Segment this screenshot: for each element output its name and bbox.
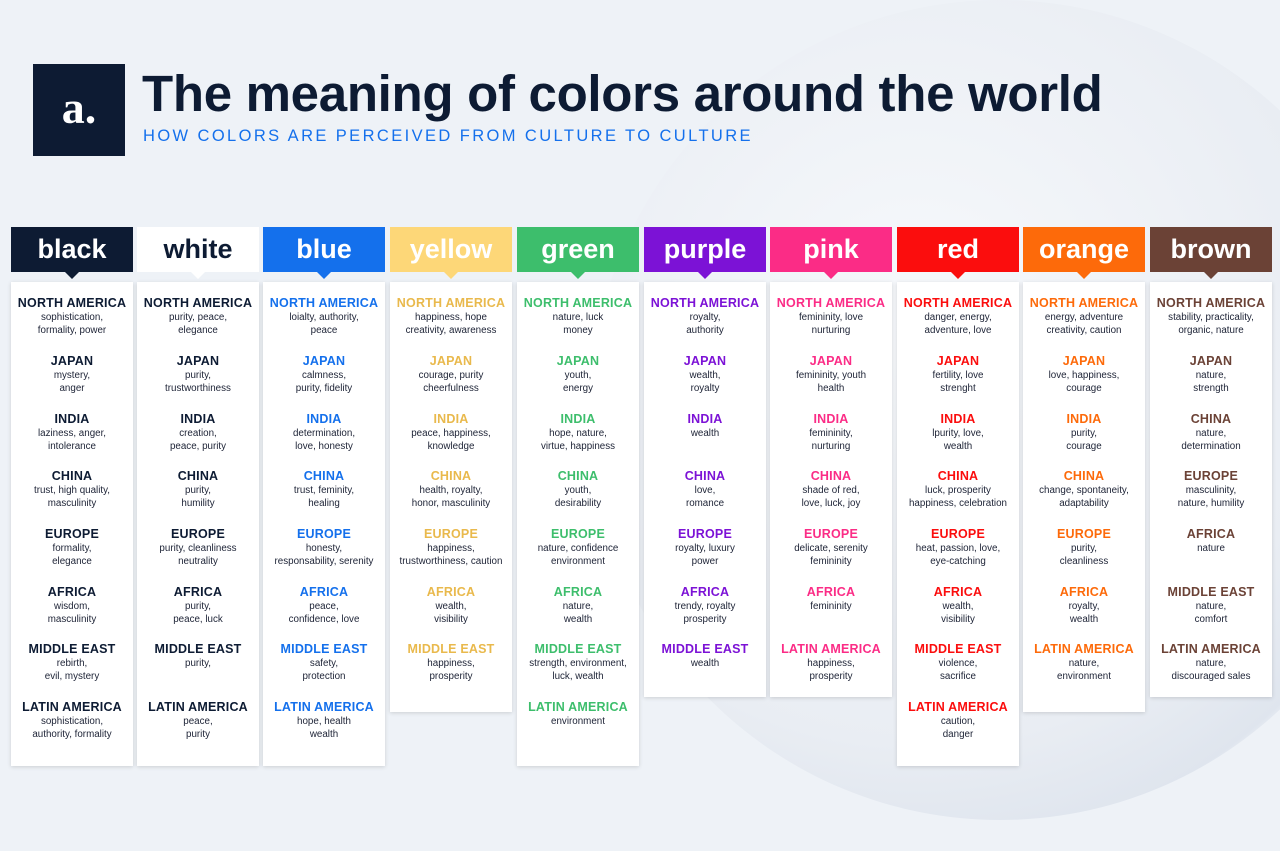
text: NORTH AMERICA	[18, 296, 126, 310]
text: purity, peace,	[169, 312, 227, 323]
text: creation,	[179, 428, 217, 439]
text: MIDDLE EAST	[915, 642, 1001, 656]
text: JAPAN	[1063, 354, 1105, 368]
text: visibility	[434, 614, 468, 625]
text: JAPAN	[1190, 354, 1232, 368]
text: strenght	[940, 383, 976, 394]
text: happiness,	[427, 658, 475, 669]
text: creativity, awareness	[406, 325, 496, 336]
text: creativity, caution	[1047, 325, 1121, 336]
text: humility	[181, 498, 215, 509]
text: CHINA	[558, 469, 598, 483]
text: CHINA	[431, 469, 471, 483]
text: nurturing	[812, 325, 850, 336]
text: trust, feminity,	[294, 485, 354, 496]
text: JAPAN	[430, 354, 472, 368]
text: LATIN AMERICA	[908, 700, 1008, 714]
column: yellow	[388, 227, 514, 714]
text: NORTH AMERICA	[1030, 296, 1138, 310]
text: danger, energy,	[924, 312, 992, 323]
text: luck, wealth	[552, 671, 604, 682]
subtitle: HOW COLORS ARE PERCEIVED FROM CULTURE TO CULTURE	[143, 127, 753, 145]
column: pink: pink	[803, 234, 859, 264]
text: CHINA	[811, 469, 851, 483]
text: healing	[308, 498, 340, 509]
text: happiness, hope	[415, 312, 487, 323]
text: nature,	[1196, 601, 1226, 612]
text: violence,	[939, 658, 977, 669]
text: JAPAN	[810, 354, 852, 368]
text: purity,	[185, 485, 211, 496]
text: health, royalty,	[420, 485, 482, 496]
text: laziness, anger,	[38, 428, 106, 439]
text: peace,	[309, 601, 339, 612]
text: AFRICA	[300, 585, 348, 599]
text: knowledge	[428, 441, 474, 452]
text: MIDDLE EAST	[662, 642, 748, 656]
text: responsability, serenity	[275, 556, 373, 567]
text: change, spontaneity,	[1039, 485, 1129, 496]
text: wealth,	[435, 601, 467, 612]
text: purity,	[1071, 543, 1097, 554]
text: CHINA	[304, 469, 344, 483]
text: purity,	[185, 601, 211, 612]
text: nature,	[563, 601, 593, 612]
text: trustworthiness, caution	[400, 556, 502, 567]
text: nature,	[1196, 370, 1226, 381]
text: anger	[59, 383, 85, 394]
column: pink	[768, 227, 894, 700]
text: JAPAN	[303, 354, 345, 368]
text: heat, passion, love,	[916, 543, 1000, 554]
text: purity, fidelity	[296, 383, 352, 394]
text: nature, luck	[553, 312, 603, 323]
text: honor, masculinity	[412, 498, 490, 509]
text: prosperity	[429, 671, 472, 682]
text: INDIA	[180, 412, 216, 426]
text: health	[818, 383, 844, 394]
text: peace, luck	[173, 614, 223, 625]
text: eye-catching	[930, 556, 986, 567]
text: nature, confidence	[538, 543, 618, 554]
text: formality,	[52, 543, 92, 554]
text: evil, mystery	[45, 671, 99, 682]
text: JAPAN	[684, 354, 726, 368]
text: masculinity	[48, 614, 96, 625]
text: NORTH AMERICA	[397, 296, 505, 310]
text: JAPAN	[51, 354, 93, 368]
text: JAPAN	[937, 354, 979, 368]
text: neutrality	[178, 556, 218, 567]
text: wealth,	[689, 370, 721, 381]
text: money	[563, 325, 593, 336]
text: femininity, love	[799, 312, 863, 323]
text: purity,	[185, 370, 211, 381]
column: blue: blue	[296, 234, 352, 264]
text: sacrifice	[940, 671, 976, 682]
column: white: white	[163, 234, 232, 264]
logo	[33, 64, 125, 156]
text: delicate, serenity	[794, 543, 868, 554]
text: happiness,	[427, 543, 475, 554]
text: EUROPE	[424, 527, 478, 541]
text: MIDDLE EAST	[408, 642, 494, 656]
text: NORTH AMERICA	[777, 296, 885, 310]
title: The meaning of colors around the world	[142, 65, 1102, 122]
text: prosperity	[683, 614, 726, 625]
text: cheerfulness	[423, 383, 479, 394]
text: AFRICA	[174, 585, 222, 599]
text: purity,	[185, 658, 211, 669]
text: sophistication,	[41, 312, 103, 323]
text: wisdom,	[54, 601, 90, 612]
text: CHINA	[685, 469, 725, 483]
text: INDIA	[306, 412, 342, 426]
text: romance	[686, 498, 724, 509]
text: peace	[311, 325, 337, 336]
text: stability, practicality,	[1168, 312, 1254, 323]
text: INDIA	[433, 412, 469, 426]
text: purity, cleanliness	[159, 543, 237, 554]
text: authority, formality	[32, 729, 112, 740]
text: sophistication,	[41, 716, 103, 727]
text: wealth	[691, 428, 719, 439]
text: INDIA	[940, 412, 976, 426]
text: NORTH AMERICA	[270, 296, 378, 310]
text: fertility, love	[932, 370, 984, 381]
text: love, happiness,	[1049, 370, 1119, 381]
column: brown: brown	[1170, 234, 1252, 264]
text: formality, power	[38, 325, 106, 336]
column: orange: orange	[1039, 234, 1129, 264]
text: environment	[551, 556, 605, 567]
text: determination	[1181, 441, 1241, 452]
text: hope, health	[297, 716, 351, 727]
column: yellow: yellow	[410, 234, 492, 264]
text: calmness,	[302, 370, 346, 381]
text: INDIA	[687, 412, 723, 426]
text: nature,	[1196, 658, 1226, 669]
text: trust, high quality,	[34, 485, 110, 496]
text: EUROPE	[678, 527, 732, 541]
text: trustworthiness	[165, 383, 231, 394]
text: NORTH AMERICA	[651, 296, 759, 310]
text: youth,	[565, 370, 591, 381]
text: energy, adventure	[1045, 312, 1123, 323]
column: black	[10, 227, 134, 768]
text: comfort	[1195, 614, 1227, 625]
column: green	[516, 227, 640, 768]
text: EUROPE	[551, 527, 605, 541]
text: masculinity	[48, 498, 96, 509]
text: visibility	[941, 614, 975, 625]
text: EUROPE	[804, 527, 858, 541]
column: red	[896, 227, 1020, 768]
text: mystery,	[54, 370, 90, 381]
text: peace,	[183, 716, 213, 727]
text: INDIA	[1066, 412, 1102, 426]
text: safety,	[310, 658, 338, 669]
text: NORTH AMERICA	[904, 296, 1012, 310]
text: LATIN AMERICA	[781, 642, 881, 656]
text: MIDDLE EAST	[281, 642, 367, 656]
text: AFRICA	[934, 585, 982, 599]
column: purple	[642, 227, 768, 700]
text: femininity, youth	[796, 370, 866, 381]
text: peace, purity	[170, 441, 226, 452]
text: lpurity, love,	[932, 428, 984, 439]
text: courage	[1066, 441, 1102, 452]
text: EUROPE	[297, 527, 351, 541]
text: CHINA	[938, 469, 978, 483]
text: EUROPE	[1057, 527, 1111, 541]
column: green: green	[541, 234, 615, 264]
text: femininity	[810, 601, 852, 612]
text: nature, humility	[1178, 498, 1244, 509]
text: AFRICA	[681, 585, 729, 599]
text: MIDDLE EAST	[1168, 585, 1254, 599]
column: blue	[262, 227, 386, 768]
text: CHINA	[1064, 469, 1104, 483]
text: royalty, luxury	[675, 543, 735, 554]
text: youth,	[565, 485, 591, 496]
text: AFRICA	[427, 585, 475, 599]
text: shade of red,	[802, 485, 860, 496]
text: wealth	[310, 729, 338, 740]
text: AFRICA	[1187, 527, 1235, 541]
text: happiness, celebration	[909, 498, 1007, 509]
text: MIDDLE EAST	[535, 642, 621, 656]
text: luck, prosperity	[925, 485, 991, 496]
text: INDIA	[560, 412, 596, 426]
text: NORTH AMERICA	[1157, 296, 1265, 310]
text: love, luck, joy	[802, 498, 860, 509]
background globe	[590, 0, 1280, 820]
text: purity,	[1071, 428, 1097, 439]
text: JAPAN	[177, 354, 219, 368]
text: love,	[695, 485, 715, 496]
text: purity	[186, 729, 210, 740]
text: masculinity,	[1186, 485, 1236, 496]
text: NORTH AMERICA	[524, 296, 632, 310]
text: LATIN AMERICA	[528, 700, 628, 714]
column: purple: purple	[664, 234, 746, 264]
column: black: black	[37, 234, 107, 264]
text: elegance	[178, 325, 218, 336]
text: peace, happiness,	[411, 428, 491, 439]
text: EUROPE	[171, 527, 225, 541]
text: determination,	[293, 428, 355, 439]
text: AFRICA	[1060, 585, 1108, 599]
text: nature,	[1196, 428, 1226, 439]
text: courage	[1066, 383, 1102, 394]
text: royalty	[691, 383, 719, 394]
text: honesty,	[306, 543, 342, 554]
text: adaptability	[1059, 498, 1109, 509]
text: LATIN AMERICA	[274, 700, 374, 714]
text: strength	[1193, 383, 1229, 394]
text: environment	[551, 716, 605, 727]
text: NORTH AMERICA	[144, 296, 252, 310]
text: CHINA	[178, 469, 218, 483]
text: confidence, love	[289, 614, 359, 625]
text: CHINA	[1191, 412, 1231, 426]
text: hope, nature,	[549, 428, 607, 439]
text: trendy, royalty	[675, 601, 735, 612]
text: nature,	[1069, 658, 1099, 669]
text: courage, purity	[419, 370, 483, 381]
text: cleanliness	[1060, 556, 1108, 567]
text: organic, nature	[1178, 325, 1244, 336]
text: AFRICA	[48, 585, 96, 599]
text: CHINA	[52, 469, 92, 483]
text: MIDDLE EAST	[29, 642, 115, 656]
text: rebirth,	[57, 658, 87, 669]
text: love, honesty	[295, 441, 353, 452]
text: energy	[563, 383, 593, 394]
text: INDIA	[813, 412, 849, 426]
text: power	[692, 556, 718, 567]
text: wealth	[944, 441, 972, 452]
column: white	[136, 227, 260, 768]
text: desirability	[555, 498, 601, 509]
text: caution,	[941, 716, 975, 727]
text: LATIN AMERICA	[1161, 642, 1261, 656]
text: nurturing	[812, 441, 850, 452]
text: wealth	[1070, 614, 1098, 625]
text: EUROPE	[931, 527, 985, 541]
text: authority	[686, 325, 724, 336]
column: orange	[1022, 227, 1146, 714]
text: protection	[302, 671, 346, 682]
text: MIDDLE EAST	[155, 642, 241, 656]
text: EUROPE	[45, 527, 99, 541]
text: wealth,	[942, 601, 974, 612]
text: strength, environment,	[529, 658, 627, 669]
text: LATIN AMERICA	[1034, 642, 1134, 656]
text: prosperity	[809, 671, 852, 682]
text: femininity,	[809, 428, 853, 439]
text: royalty,	[690, 312, 720, 323]
text: LATIN AMERICA	[148, 700, 248, 714]
text: wealth	[564, 614, 592, 625]
text: adventure, love	[924, 325, 992, 336]
text: INDIA	[54, 412, 90, 426]
text: virtue, happiness	[541, 441, 615, 452]
text: nature	[1197, 543, 1225, 554]
text: elegance	[52, 556, 92, 567]
text: LATIN AMERICA	[22, 700, 122, 714]
text: intolerance	[48, 441, 96, 452]
column: brown	[1148, 227, 1274, 700]
text: happiness,	[807, 658, 855, 669]
logo: a.	[62, 82, 96, 133]
text: discouraged sales	[1172, 671, 1250, 682]
text: EUROPE	[1184, 469, 1238, 483]
text: danger	[943, 729, 973, 740]
text: environment	[1057, 671, 1111, 682]
text: wealth	[691, 658, 719, 669]
text: AFRICA	[554, 585, 602, 599]
column: red: red	[937, 234, 979, 264]
text: femininity	[810, 556, 852, 567]
text: AFRICA	[807, 585, 855, 599]
text: JAPAN	[557, 354, 599, 368]
text: loialty, authority,	[289, 312, 359, 323]
text: royalty,	[1069, 601, 1099, 612]
